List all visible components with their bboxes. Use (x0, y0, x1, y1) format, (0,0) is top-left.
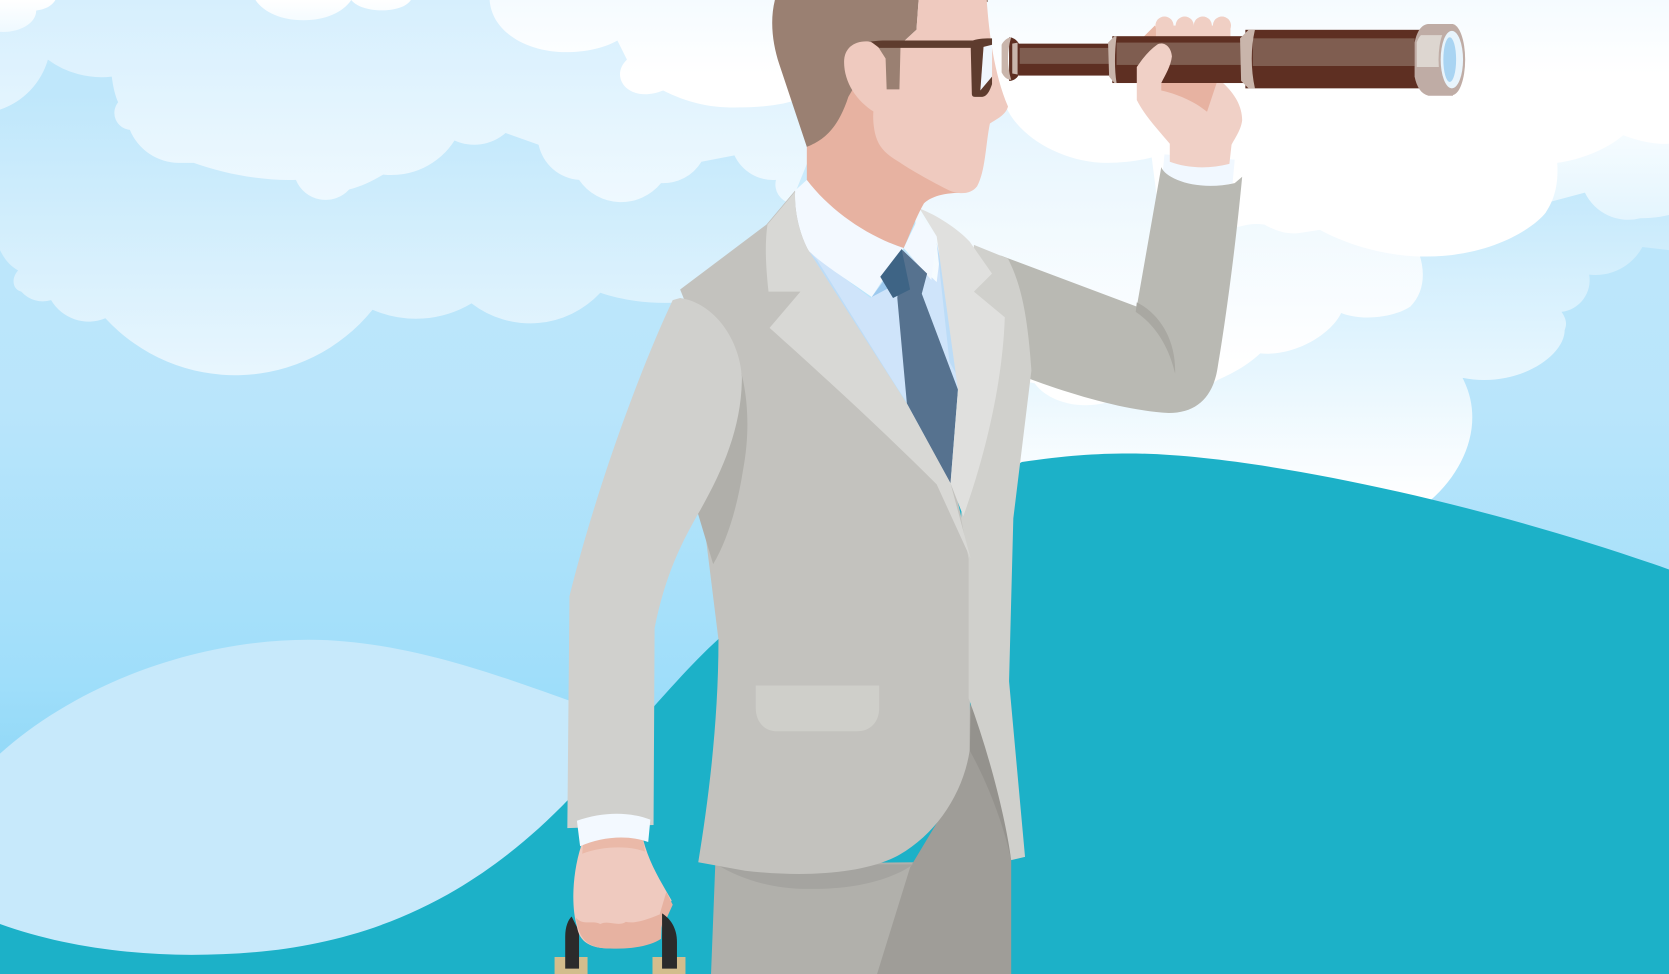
jacket: arm fold shadow (1136, 302, 1175, 374)
cloud: middle right layer (915, 96, 1423, 405)
trousers (711, 698, 1011, 974)
telescope (1002, 24, 1465, 96)
hand fingers behind telescope (1142, 16, 1231, 38)
jacket: left lapel (766, 192, 971, 559)
eyeglass frame (871, 38, 992, 97)
jacket: left sleeve (567, 298, 742, 828)
eyeglass lens (980, 45, 992, 90)
right hand holding telescope (1137, 44, 1242, 167)
cloud: upper left (0, 0, 830, 203)
head (772, 0, 1008, 248)
cloud: far right light layer (1533, 128, 1669, 220)
jacket: pocket (756, 686, 879, 731)
tube section 3 (1245, 30, 1421, 88)
shirt collar (795, 180, 937, 297)
hair (772, 0, 919, 147)
left shirt cuff (577, 814, 650, 846)
telescope brass rings (1108, 30, 1255, 88)
briefcase clasps (555, 957, 685, 974)
right shirt cuff (1162, 154, 1235, 186)
briefcase handle: right grip (662, 913, 677, 969)
shirt edge shading (809, 243, 958, 403)
necktie (872, 249, 958, 483)
cloud: top right white (490, 0, 1669, 257)
figure: businessman (555, 0, 1465, 974)
briefcase handle: left grip (565, 917, 579, 969)
face (873, 0, 1008, 193)
jacket: sleeve shadow (697, 351, 747, 564)
neck (807, 85, 966, 248)
tube section 1 (1019, 44, 1114, 76)
cloud: top-left wisps (0, 0, 411, 32)
lens cap (1415, 24, 1453, 96)
shirt (807, 240, 958, 481)
fist (573, 836, 672, 949)
sideburn (878, 47, 900, 89)
jacket: right arm (1001, 167, 1242, 413)
jacket: body (680, 191, 971, 874)
jacket: right front panel (961, 245, 1031, 860)
left hand with briefcase handle (555, 835, 685, 974)
eyepiece (1009, 37, 1020, 81)
lens (1439, 24, 1465, 95)
cloud: far right back layer (1011, 160, 1669, 500)
tube section 2 (1112, 36, 1246, 83)
eyebrow tip (979, 0, 988, 2)
hill: teal wave (0, 453, 1669, 974)
cloud: lower left (0, 64, 830, 375)
jacket: right lapel (920, 209, 1005, 516)
ear (844, 41, 888, 112)
hill: pale left wave (0, 640, 681, 974)
